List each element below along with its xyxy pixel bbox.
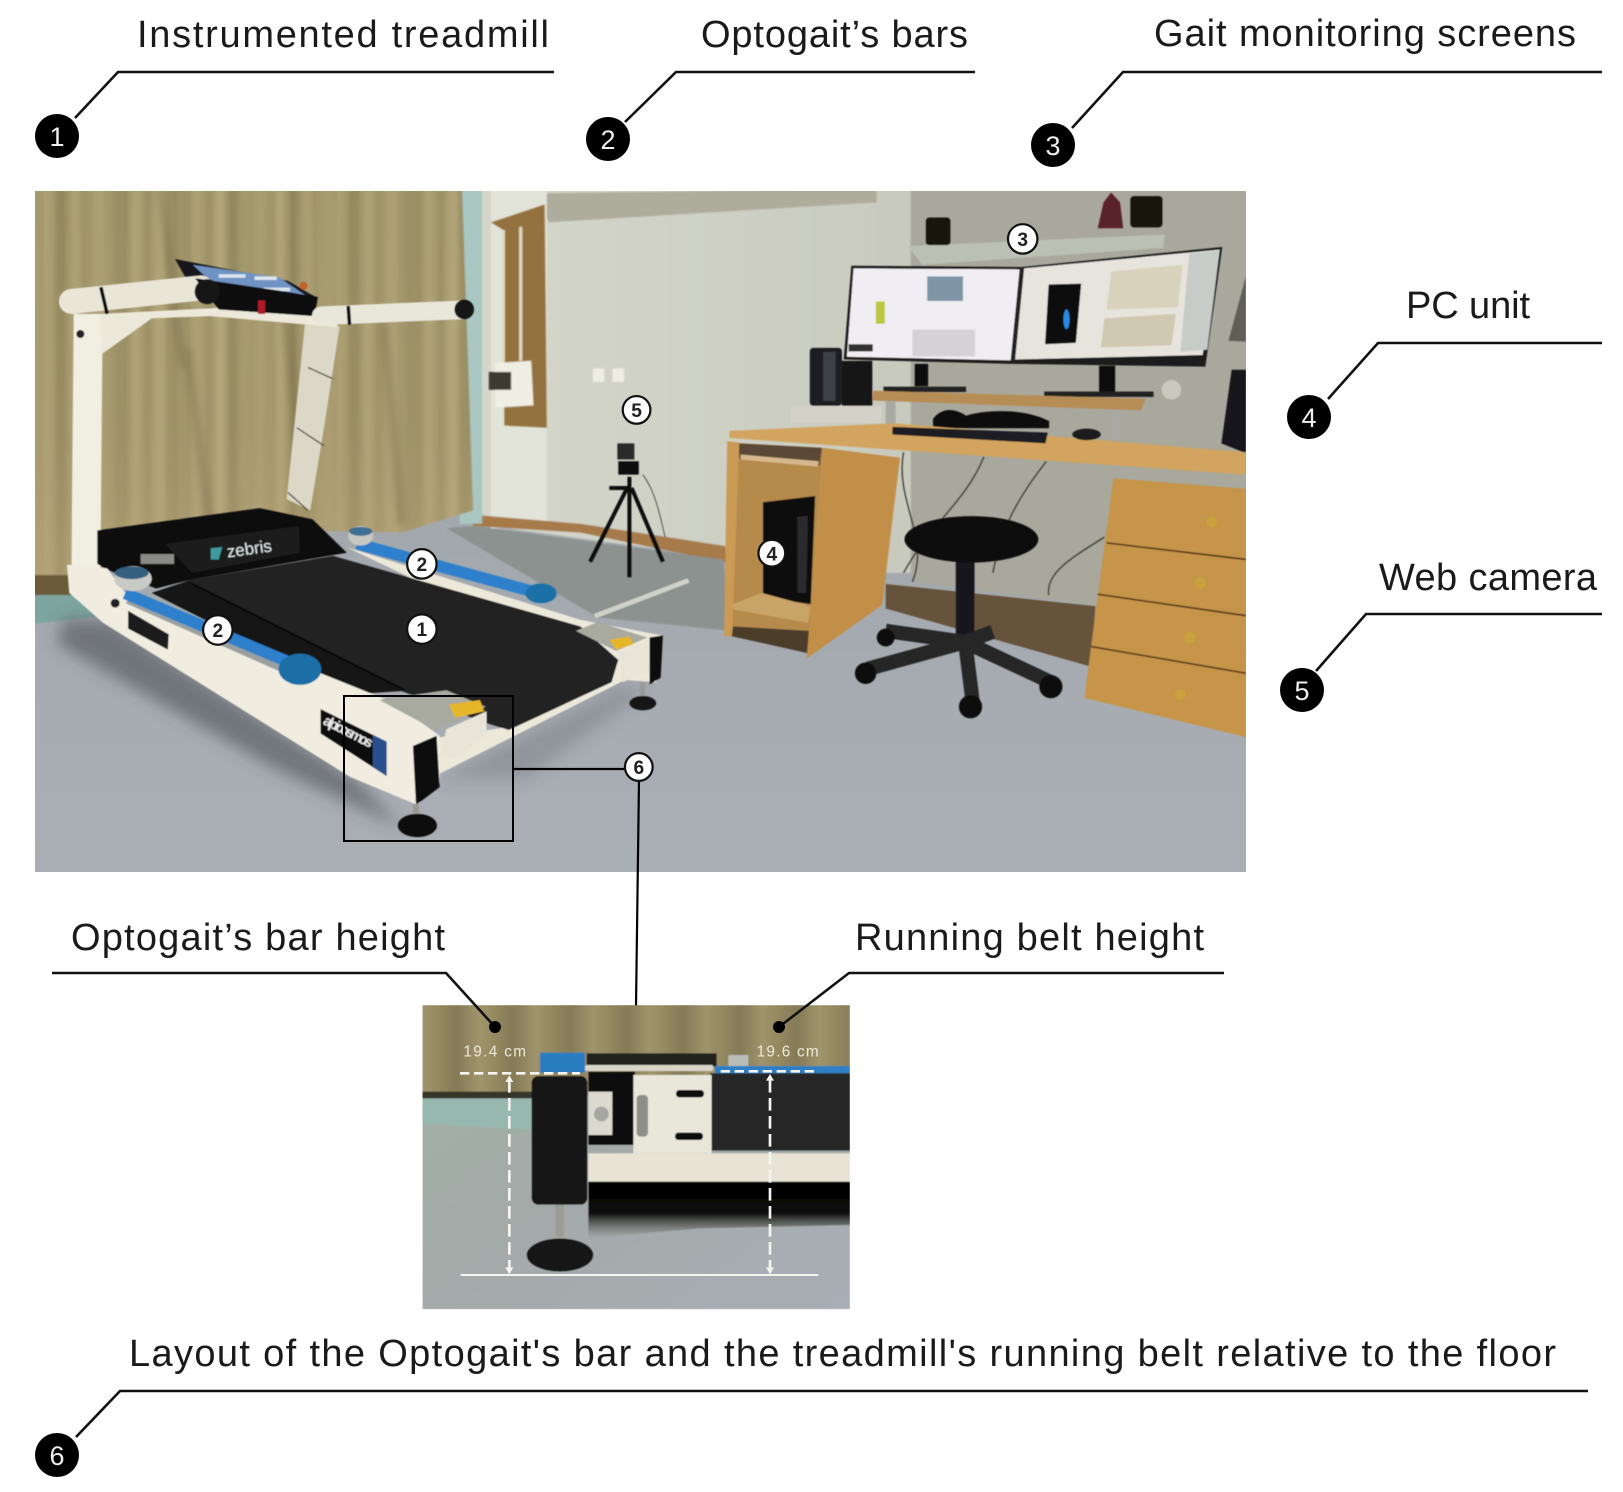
height value 19.4 cm: 19.4 cm xyxy=(463,1044,526,1061)
callout 2: Optogait's bars xyxy=(586,14,975,161)
web camera on tripod xyxy=(590,443,690,618)
callout 5: Web camera xyxy=(1280,557,1602,712)
callout 3: Gait monitoring screens xyxy=(1031,13,1602,167)
number badge: 2 xyxy=(600,125,616,155)
number badge xyxy=(35,114,79,158)
sticker panels on frame xyxy=(111,599,387,776)
leader line to dot xyxy=(779,973,1224,1027)
baseboard behind stool xyxy=(886,584,1096,667)
marker 3 screens xyxy=(1008,224,1037,254)
callout 4: PC unit xyxy=(1287,285,1602,439)
near side rail of deck xyxy=(67,565,440,805)
marker 5 camera: 5 xyxy=(631,401,642,422)
motor hood with brand: zebris xyxy=(226,537,273,562)
marker 2 far bar: 2 xyxy=(417,555,427,576)
deck end plates and yellow labels xyxy=(380,622,647,737)
number badge xyxy=(35,1433,79,1477)
leader line xyxy=(76,1391,1588,1437)
marker 2 near bar xyxy=(203,615,233,645)
marker 4 PC: 4 xyxy=(766,544,777,565)
inset scene xyxy=(422,1005,850,1309)
callout: Running belt height xyxy=(773,917,1224,1033)
marker 6 inset: 6 xyxy=(633,758,644,779)
leader line xyxy=(1328,343,1602,399)
panel: main photograph of gait laboratory xyxy=(31,189,1281,876)
PC unit tower xyxy=(733,496,815,623)
running belt xyxy=(152,556,618,730)
callout 1: Instrumented treadmill xyxy=(35,14,554,158)
curtain deep folds xyxy=(161,189,402,528)
marker 1 belt: 1 xyxy=(417,620,428,641)
leader line xyxy=(75,72,554,118)
label text: Optogait’s bars xyxy=(701,14,968,56)
label text: Running belt height xyxy=(855,917,1204,959)
desktop surface and keyboard xyxy=(729,423,1246,475)
number badge: 4 xyxy=(1301,403,1317,433)
callout 6: layout caption xyxy=(35,1333,1588,1477)
number badge xyxy=(586,117,630,161)
desk cabinet xyxy=(724,441,900,659)
end caps and feet xyxy=(398,635,663,837)
number badge: 6 xyxy=(49,1441,65,1471)
handrails xyxy=(71,278,474,325)
wall shelf with objects xyxy=(908,192,1165,265)
number badge xyxy=(1031,123,1075,167)
leader line xyxy=(1072,72,1602,128)
callout: Optogait's bar height xyxy=(52,917,501,1033)
treadmill xyxy=(67,259,663,837)
leader line xyxy=(625,72,975,122)
dual gait monitoring screens xyxy=(844,247,1222,367)
height value 19.6 cm: 19.6 cm xyxy=(757,1044,819,1061)
label text: Web camera xyxy=(1379,557,1598,599)
marker 5 camera xyxy=(623,396,650,424)
marker 1 belt xyxy=(407,614,437,644)
label text: Layout of the Optogait's bar and the treadmill's running belt relative to the floor xyxy=(129,1333,1556,1375)
callout connector from box to circle 6 xyxy=(513,768,626,770)
marker 4 PC xyxy=(758,540,785,567)
cables under desk xyxy=(902,452,1104,595)
treadmill rear posts and frame xyxy=(71,307,340,573)
panel: inset close-up photo with heights xyxy=(422,1005,850,1309)
wall mounted wooden panel xyxy=(489,205,624,428)
number badge: 5 xyxy=(1294,676,1310,706)
marker 6 inset xyxy=(625,753,653,781)
desk and furniture xyxy=(724,192,1246,737)
marker 3 screens: 3 xyxy=(1017,230,1028,251)
photo backdrop: curtain, wall and floor xyxy=(31,189,1281,876)
motor hood with brand xyxy=(97,508,347,588)
leader line to dot xyxy=(52,973,495,1027)
number badge: 1 xyxy=(49,122,65,152)
label text: Optogait’s bar height xyxy=(71,917,445,959)
label text: PC unit xyxy=(1406,285,1530,327)
leader dot xyxy=(489,1021,501,1033)
number badge xyxy=(1287,395,1331,439)
leader line xyxy=(1316,614,1602,671)
sticker panels on frame: alpicosmos xyxy=(320,713,376,752)
height arrows and dashed reference lines xyxy=(460,1071,818,1275)
far Optogait bar xyxy=(348,526,557,603)
leader dot xyxy=(773,1021,785,1033)
connector from circle 6 to inset photo xyxy=(636,780,639,1006)
marker 2 far bar xyxy=(407,549,437,579)
right far monitor and wall items xyxy=(1162,276,1246,453)
drawer unit xyxy=(1084,478,1246,737)
number badge: 3 xyxy=(1045,131,1061,161)
console with touch screen xyxy=(175,259,318,312)
monitor stands and wooden riser xyxy=(872,363,1154,424)
near Optogait bar xyxy=(114,566,321,685)
label text: Instrumented treadmill xyxy=(137,14,549,56)
stool xyxy=(855,516,1062,718)
marker 2 near bar: 2 xyxy=(213,621,223,642)
label text: Gait monitoring screens xyxy=(1154,13,1576,55)
arrowheads xyxy=(505,1074,774,1274)
number badge xyxy=(1280,668,1324,712)
floor shadows beneath treadmill xyxy=(58,620,643,827)
black equipment and white hub xyxy=(790,348,1049,428)
inset region marker box xyxy=(344,696,513,841)
photo callout markers xyxy=(203,224,1037,781)
right side rail of deck xyxy=(346,547,662,774)
